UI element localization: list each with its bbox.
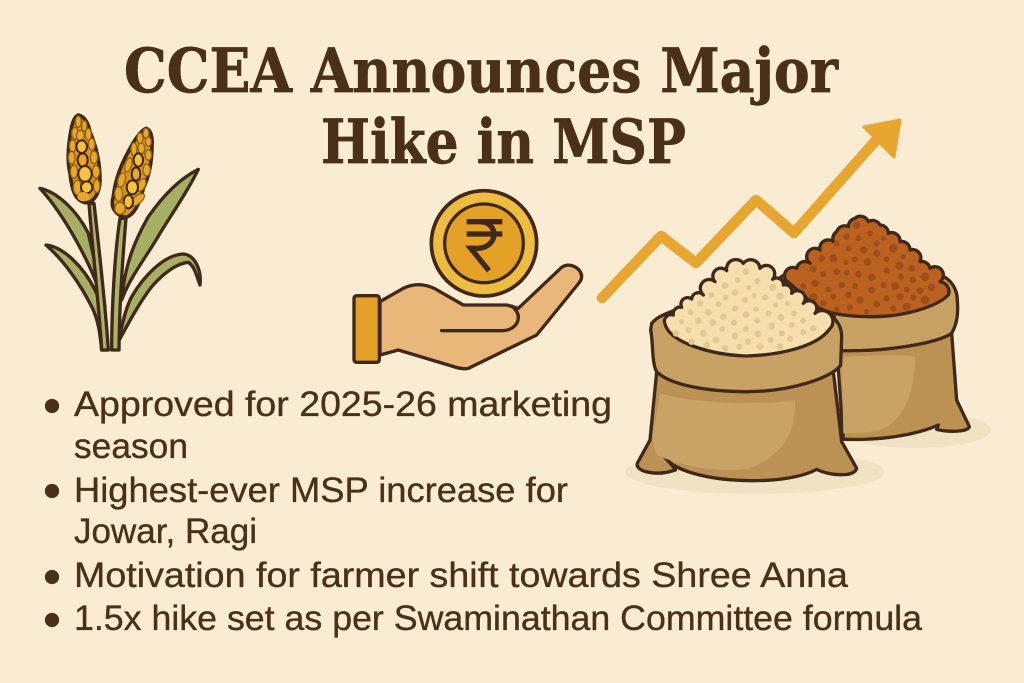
- title: [124, 36, 839, 178]
- icon: millet plant: [40, 115, 200, 350]
- white grain pile: [664, 260, 833, 356]
- hand: [380, 265, 582, 369]
- bullet 4: 1.5x hike set as per Swaminathan Committee formula: [74, 599, 923, 638]
- bullet 1: [45, 385, 612, 466]
- icon: front sack of white millet: [637, 260, 857, 481]
- bullet 2: Jowar, Ragi: [74, 512, 257, 551]
- red grain pile: [784, 216, 949, 317]
- rupee coin: [431, 191, 537, 296]
- bullet 3: Motivation for farmer shift towards Shree Anna: [74, 556, 849, 595]
- right grain head: [112, 128, 152, 217]
- bullet 1: Approved for 2025-26 marketing: [74, 385, 612, 424]
- bullet 2: Highest-ever MSP increase for: [74, 471, 568, 510]
- icon: hand holding rupee coin: [354, 191, 582, 369]
- left grain head: [68, 115, 100, 203]
- bullet 1: season: [74, 427, 188, 466]
- bullet list: [45, 385, 923, 638]
- bullet 2: [45, 471, 568, 551]
- arrow: rising trend: [602, 120, 900, 298]
- title: Hike in MSP: [321, 107, 686, 178]
- sack shadows: [625, 412, 991, 494]
- title: CCEA Announces Major: [124, 36, 839, 107]
- cuff: [354, 296, 379, 362]
- icon: back sack of red millet: [779, 216, 969, 439]
